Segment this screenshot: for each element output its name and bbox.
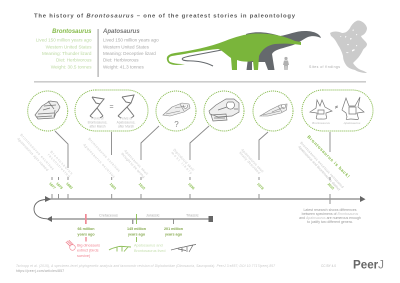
citation (16, 264, 275, 273)
pelvis captions: Brontosaurus, (88, 120, 108, 124)
extinction text: Big dinosaurs (77, 244, 100, 248)
map of North America (330, 20, 367, 73)
rotated event labels: Brontosaurus excelsus (87, 137, 121, 173)
rotated event labels: Brontosaurus excelsus reinstated (299, 141, 345, 189)
Brontosaurus facts: Diet: Herbivorous (56, 58, 92, 62)
rotated event labels: finally described (238, 151, 261, 175)
date labels: years ago (128, 232, 146, 236)
licence: CC BY 4.0 (321, 264, 336, 268)
Brontosaurus facts: Western United States (46, 44, 92, 50)
Apatosaurus facts: Lived 150 million years ago (103, 38, 159, 42)
rotated event labels: Apatosaurus skull (123, 149, 149, 176)
date labels: 66 million (77, 227, 95, 231)
Apatosaurus facts: Meaning: Deceptive lizard (103, 51, 156, 56)
title: The history of Brontosaurus – one of the greatest stories in paleontology (34, 14, 296, 20)
sauropods text: Brontosaurus lived (134, 249, 165, 253)
research summary: between specimens of Brontosaurus (302, 212, 359, 216)
Apatosaurus facts: Apatosaurus (102, 29, 140, 35)
icon: skull (163, 103, 190, 116)
panel: vertebrae comparison: Apatosaurus (343, 121, 361, 125)
equals sign: = (109, 104, 114, 111)
timeline years: 1903 (109, 182, 117, 191)
timeline years: 1879 (55, 182, 63, 190)
callout: Brontosaurus is back: Brontosaurus is back! (306, 134, 351, 179)
icon: Apatosaurus pelvis (118, 95, 134, 118)
pelvis captions: after Marsh (89, 124, 106, 128)
icon: skull (260, 104, 287, 116)
map caption: Sites of findings (309, 65, 340, 69)
extinction text: extinct (birds (77, 248, 99, 252)
rotated event labels: most likely (170, 151, 193, 175)
extinction text: survive) (77, 254, 91, 258)
rotated event labels (16, 133, 345, 192)
pelvis captions: Pelvis of (91, 116, 104, 120)
rotated event labels: thought to be wrong (120, 152, 146, 179)
rotated event labels: Apatosaurus ajax named (16, 137, 49, 172)
icon: green sauropod (109, 246, 131, 252)
panel: uncertain skull circle (156, 91, 196, 131)
icon: Brontosaurus pelvis (90, 97, 104, 118)
Brontosaurus facts: Lived 150 million years ago (36, 38, 92, 42)
date labels (77, 227, 184, 236)
timeline years (48, 182, 335, 191)
geological period labels: Cretaceous (99, 214, 118, 218)
sauropods text (134, 244, 165, 253)
Brontosaurus facts: Weight: 30.5 tonnes (51, 64, 92, 70)
date labels: 201 million (164, 227, 184, 231)
Apatosaurus facts: Western United States (103, 44, 150, 50)
rotated event labels: Apatosaurus skull (240, 148, 264, 174)
Brontosaurus facts: Meaning: Thunder lizard (42, 51, 92, 56)
rotated event labels: reconstructed (47, 153, 71, 178)
citation: Tschopp et al. (2015), A specimen-level phylogenetic analysis and taxonomic revision of Diplodocidae (Dinosauria, Sauropoda). PeerJ 3:e857; DOI 10.7717/peerj.857 (16, 264, 275, 268)
research summary: Latest research shows differences (303, 208, 357, 212)
pelvis captions: after Marsh (118, 124, 134, 128)
rotated event labels: Brontosaurus (49, 150, 74, 176)
return arrow (34, 200, 47, 219)
icon: extinction asteroid (66, 240, 75, 250)
timeline (34, 196, 366, 222)
panel: pelvis comparison (75, 90, 148, 131)
icon: skull (209, 99, 239, 121)
Brontosaurus facts: Brontosaurus (52, 29, 92, 35)
geological period labels: Triassic (186, 214, 199, 218)
timeline years: 1936 (187, 182, 195, 191)
research summary: and Apatosaurus are numerous enough (299, 216, 361, 220)
date labels: years ago (165, 232, 183, 236)
timeline years: 1883 (65, 182, 73, 190)
panel: slender skull circle (253, 91, 293, 131)
period boundary ticks (85, 214, 174, 242)
Brontosaurus facts (36, 29, 92, 70)
pelvis captions (88, 116, 135, 128)
timeline ticks (52, 177, 330, 204)
research summary (299, 208, 361, 224)
pelvis captions: Apatosaurus, (117, 120, 135, 124)
icon: Apatosaurus vertebra (342, 97, 364, 120)
not-equal sign: ≠ (335, 105, 339, 111)
Apatosaurus facts (102, 29, 159, 70)
leader lines (55, 126, 330, 168)
Apatosaurus facts: Weight: 41.3 tonnes (103, 64, 144, 70)
icon: Brontosaurus vertebra (310, 100, 332, 119)
date labels: 145 million (127, 227, 147, 231)
panel: vertebrae comparison (302, 90, 373, 131)
logo: PeerJ: PeerJ (353, 260, 384, 272)
divider (98, 29, 99, 77)
panel: correct skull circle (204, 91, 244, 131)
rotated event labels: Apatosaurus excelsus (82, 143, 116, 179)
timeline years: 1877 (48, 182, 56, 190)
pelvis captions: Pelvis of (120, 116, 132, 120)
arrowheads (45, 196, 366, 222)
icon: grey sauropod (171, 244, 196, 252)
question mark: ? (174, 120, 179, 129)
extinction text (77, 244, 100, 258)
Apatosaurus silhouette (182, 31, 321, 70)
date labels: years ago (77, 232, 95, 236)
rotated event labels: Brontosaurus excelsus (19, 133, 55, 171)
geological period labels (99, 214, 199, 218)
Apatosaurus facts: Diet: Herbivorous (103, 58, 139, 62)
rotated event labels: Diplodocid skull (172, 148, 195, 172)
vertebra captions: Brontosaurus (312, 121, 330, 125)
timeline years: 1978 (256, 182, 264, 191)
research summary: to justify two different genera. (307, 220, 353, 224)
citation: https://peerj.com/articles/857 (16, 269, 64, 273)
timeline years: 1915 (138, 182, 146, 191)
icon: skull (35, 101, 60, 119)
dinosaur silhouettes (167, 31, 321, 70)
timeline years: 2015 (327, 182, 335, 191)
panel: first skull circle (28, 91, 68, 131)
Brontosaurus silhouette (167, 33, 301, 70)
rotated event labels: Apatosaurus and Brontosaurus distinct (297, 145, 341, 192)
sauropods text: Apatosaurus and (134, 244, 163, 248)
human for scale (283, 57, 289, 70)
geological period labels: Jurassic (146, 214, 160, 218)
